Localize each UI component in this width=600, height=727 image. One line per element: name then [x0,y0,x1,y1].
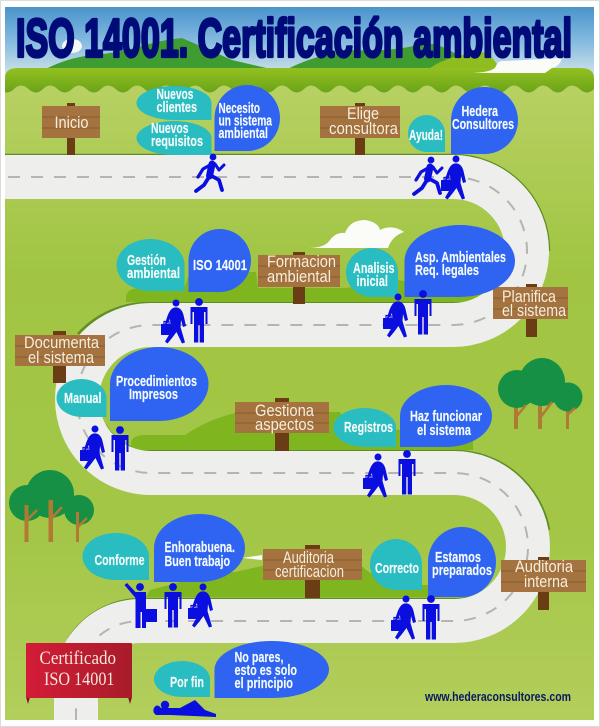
bubble: Registros: Registros [344,420,393,436]
bubble: Conforme [82,533,149,580]
figures: pair Correcto [391,595,440,640]
road edge [5,155,549,640]
bubble: Procedimientos Impresos [110,347,208,421]
bubble: Enhorabuena: Enhorabuena. [164,540,235,556]
hill behind auditoria [146,566,429,597]
bubble: Manual: Manual [64,391,102,407]
bubble: Haz funcionar el sistema: Haz funcionar [410,409,482,425]
bubble: Nuevos requisitos: requisitos [151,134,203,150]
sky [5,7,594,77]
bubble: Gestión ambiental: Gestión [127,253,166,269]
bubble: Nuevos clientes [137,86,212,120]
sign: Certificado ISO 14001 [26,643,132,704]
bubble: Gestión ambiental [117,239,184,291]
sign: Documenta el sistema: el sistema [28,348,94,367]
bubble: Analisis inicial: inicial [356,274,388,290]
sign: Gestiona aspectos [235,398,329,451]
bubble: Nuevos clientes: clientes [156,100,197,116]
bubble: Asp. Ambientales Req. legales: Asp. Ambientales [415,250,506,266]
bubble: No pares: el principio [234,676,293,692]
bubble: Haz funcionar el sistema [400,385,492,447]
figures: pair Gestion [161,298,208,344]
small cloud tail near auditoria sign [242,555,262,560]
bubble: Por fin: Por fin [170,675,204,691]
sign: Elige consultora: consultora [329,119,398,138]
road [0,177,528,727]
figure: runner 2 [414,157,442,194]
bubble: Correcto: Correcto [375,561,419,577]
hill behind gestiona [131,412,473,450]
bubble: Conforme: Conforme [94,553,144,569]
bubble: Correcto [370,539,422,590]
sign: Gestiona aspectos: Gestiona [255,401,314,420]
sign: Auditoria certificacion [263,545,362,598]
bubble: No pares: esto es solo [234,663,297,679]
bubble: Asp. Ambientales Req. legales [404,225,515,297]
bubble: Enhorabuena [154,514,245,582]
bubble: Necesito un sistema ambiental [214,85,280,151]
bubble: Ayuda!: Ayuda! [409,128,443,144]
bubble: ISO 14001: ISO 14001 [193,258,247,274]
bubble: Nuevos requisitos: Nuevos [151,121,188,137]
bubble: Gestión ambiental: ambiental [127,266,180,282]
bubble: Hedera Consultores [451,87,518,154]
bubble: Estamos preparados: preparados [432,563,492,579]
figure: person lying [153,700,216,717]
bubble: Necesito un sistema ambiental: Necesito [218,101,260,117]
sign: Certificado ISO 14001: Certificado [40,648,116,669]
figure: runner 1 [196,154,224,191]
bubble: Por fin [154,661,210,697]
bubble: Haz funcionar el sistema: el sistema [417,423,472,439]
sign: Inicio: Inicio [54,113,88,132]
bubble: Registros [334,408,396,447]
figures: group Conforme [124,583,213,628]
sign: Documenta el sistema [15,331,105,383]
sign: Auditoria interna: interna [524,572,568,591]
sign: Formacion ambiental [258,252,340,304]
sign: Inicio [42,103,100,155]
hill behind formacion [126,272,484,302]
sign: Planifica el sistema: Planifica [502,287,556,306]
bubble: Nuevos clientes: Nuevos [156,87,194,103]
trees right [498,358,582,429]
cloud middle [308,220,404,248]
bubble: Analisis inicial: Analisis [353,261,394,277]
bubble: Hedera Consultores: Hedera [462,104,499,120]
bubble: No pares: No pares, [234,650,284,666]
sign: Auditoria interna [501,557,586,610]
bubble: Asp. Ambientales Req. legales: Req. legales [415,263,479,279]
bubble: Procedimientos Impresos: Impresos [129,387,178,403]
bubble: Ayuda! [408,115,445,152]
bubble: Analisis inicial [346,248,398,297]
bubble: Estamos preparados [428,527,496,597]
bubble: Enhorabuena: Buen trabajo [164,554,230,570]
bubble: ISO 14001 [188,229,251,292]
sign: Auditoria interna: Auditoria [515,557,573,576]
sign: Planifica el sistema [493,284,568,337]
figures: pair Manual [80,426,128,470]
sign: Auditoria certificacion: certificacion [275,562,344,581]
bubble: Necesito un sistema ambiental: un sistema [218,114,273,130]
sign: Elige consultora: Elige [347,104,379,123]
bubble: Manual [56,379,106,417]
road centre dashes [8,177,528,727]
green rise under the cloud [430,52,500,68]
trees left [9,470,94,542]
sign: Documenta el sistema: Documenta [24,333,99,352]
sign: Auditoria certificacion: Auditoria [283,548,334,567]
sign: Elige consultora [320,103,400,155]
bubble: Necesito un sistema ambiental: ambiental [218,126,268,142]
figure: consultant with briefcase [441,156,466,200]
figures: pair Registros [363,450,416,498]
website: www.hederaconsultores.com [424,689,571,704]
distant hills [48,38,455,68]
cloud top right [473,58,562,73]
bubble: Hedera Consultores: Consultores [452,117,514,133]
sign: Planifica el sistema: el sistema [502,301,566,320]
sign: Formacion ambiental: ambiental [267,267,331,286]
top green band [0,68,594,92]
sign: Formacion ambiental: Formacion [267,252,336,271]
figures: pair Analisis [383,290,432,338]
bubble: No pares [214,641,329,698]
sign: Gestiona aspectos: aspectos [255,415,314,434]
sign: Certificado ISO 14001: ISO 14001 [44,669,114,690]
bubble: Nuevos requisitos [137,121,212,155]
bubble: Procedimientos Impresos: Procedimientos [116,374,197,390]
small cloud behind title [62,39,82,53]
bubble: Estamos preparados: Estamos [435,550,481,566]
